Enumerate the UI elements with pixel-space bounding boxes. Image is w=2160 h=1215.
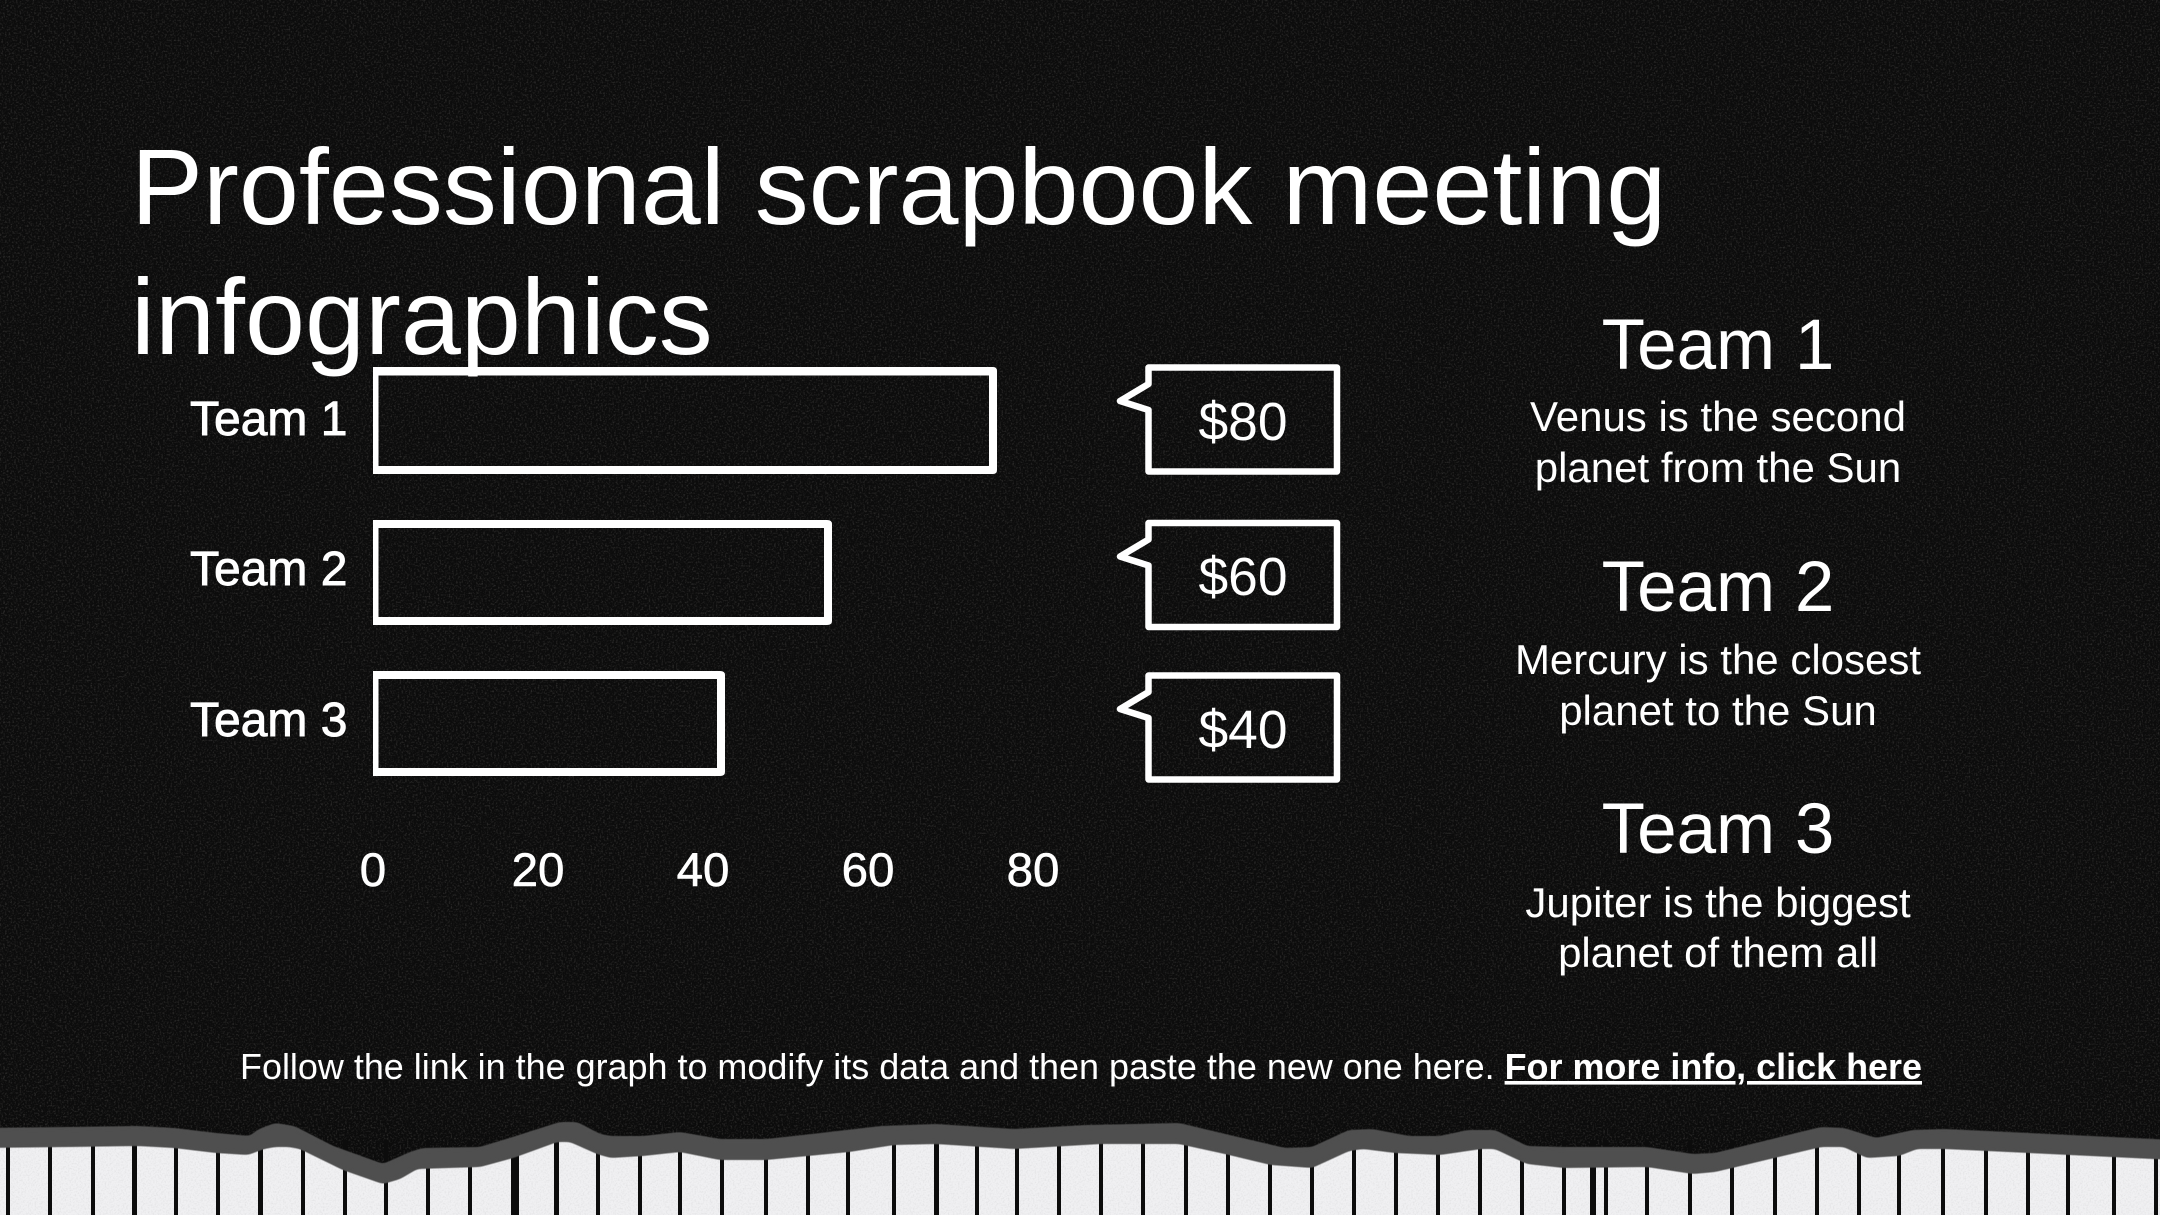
title: infographics <box>131 256 713 377</box>
callout: $80 <box>1120 368 1337 472</box>
torn paper strip <box>0 1120 2160 1215</box>
category labels: Team 2 <box>190 543 347 596</box>
axis labels: 0 <box>360 844 386 897</box>
text block: Team 2: planet to the Sun <box>1559 687 1877 734</box>
text block: Team 2 <box>1515 548 1921 734</box>
callout: $40: $40 <box>1199 701 1287 760</box>
axis labels <box>360 844 1059 897</box>
notebook lines <box>6 1140 2158 1215</box>
axis labels: 40 <box>677 844 729 897</box>
text block: Team 3: Team 3 <box>1602 790 1834 869</box>
footer note: Follow the link in the graph to modify its data and then paste the new one here. For more info, click here <box>240 1046 1922 1087</box>
paper <box>0 1141 2160 1215</box>
axis labels: 80 <box>1007 844 1059 897</box>
text block: Team 1 <box>1530 306 1906 491</box>
category labels <box>190 393 347 747</box>
category labels: Team 3 <box>190 694 347 747</box>
text block: Team 2: Mercury is the closest <box>1515 636 1921 683</box>
title: Professional scrapbook meeting <box>131 126 1666 247</box>
axis labels: 60 <box>842 844 894 897</box>
torn edge shadow band <box>0 1123 2160 1183</box>
axis labels: 20 <box>512 844 564 897</box>
callout: $80: $80 <box>1199 393 1287 452</box>
text block: Team 1: Team 1 <box>1602 306 1834 385</box>
text block: Team 3: planet of them all <box>1558 929 1878 976</box>
text block: Team 1: planet from the Sun <box>1535 444 1901 491</box>
callout: $60: $60 <box>1199 548 1287 607</box>
bar chart <box>190 367 1059 897</box>
category labels: Team 1 <box>190 393 347 446</box>
bar: Team 1 <box>373 367 997 474</box>
bar: Team 2 <box>373 520 832 625</box>
text block: Team 2: Team 2 <box>1602 548 1834 627</box>
text block: Team 1: Venus is the second <box>1530 393 1906 440</box>
text block: Team 3: Jupiter is the biggest <box>1525 879 1911 926</box>
callout: $60 <box>1120 523 1337 627</box>
bar: Team 3 <box>373 671 725 776</box>
paper grain <box>0 1120 2160 1215</box>
callout: $40 <box>1120 676 1337 780</box>
text block: Team 3 <box>1525 790 1911 976</box>
